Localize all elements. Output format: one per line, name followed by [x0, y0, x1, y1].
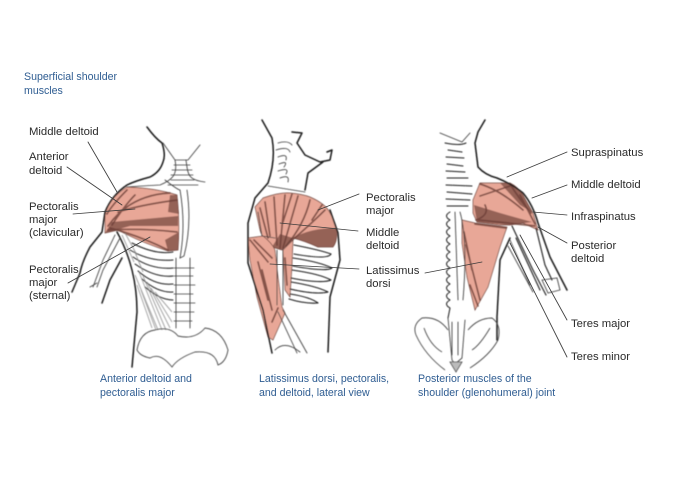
sacrum tip: [450, 362, 462, 372]
labels: posterior view: [571, 147, 644, 363]
labels: lateral view: [366, 192, 420, 290]
muscle: pectoralis and deltoid: [255, 193, 337, 250]
caption: anterior view: pectoralis major: [100, 387, 175, 399]
labels: lateral view: Pectoralis: [366, 192, 416, 204]
pelvis: [415, 318, 499, 370]
title: Superficial shoulder: [24, 71, 117, 83]
leader lines: anterior view: [67, 142, 150, 283]
caption: posterior view: shoulder (glenohumeral) joint: [418, 387, 555, 399]
labels: lateral view: major: [366, 205, 394, 217]
labels: anterior view: Anterior: [29, 151, 69, 163]
labels: anterior view: (sternal): [29, 290, 71, 302]
leader lines: lateral view: [270, 194, 359, 269]
labels: posterior view: deltoid: [571, 253, 604, 265]
body outline: [248, 120, 340, 353]
rib cage: [130, 243, 173, 300]
oblique shading: [122, 233, 172, 330]
muscle: latissimus dorsi: [462, 220, 507, 310]
caption: lateral view: and deltoid, lateral view: [259, 387, 370, 399]
labels: anterior view: Pectoralis: [29, 264, 79, 276]
labels: lateral view: Latissimus: [366, 265, 419, 277]
labels: anterior view: Middle deltoid: [29, 126, 99, 138]
labels: posterior view: Supraspinatus: [571, 147, 644, 159]
figure: lateral view: [248, 120, 340, 353]
labels: posterior view: Teres major: [571, 318, 630, 330]
spine and sternum: [127, 160, 205, 328]
torso and arm outline: [72, 127, 200, 367]
caption: anterior view: Anterior deltoid and: [100, 373, 192, 385]
pelvis: [137, 328, 228, 367]
labels: posterior view: Teres minor: [571, 351, 630, 363]
figure: posterior view: [415, 120, 567, 372]
muscle: anterior deltoid and pectoralis major: [105, 187, 179, 251]
labels: posterior view: Posterior: [571, 240, 616, 252]
caption: lateral view: Latissimus dorsi, pectoralis,: [259, 373, 389, 385]
labels: posterior view: Middle deltoid: [571, 179, 641, 191]
labels: lateral view: Middle: [366, 227, 399, 239]
labels: lateral view: deltoid: [366, 240, 399, 252]
labels: lateral view: dorsi: [366, 278, 390, 290]
caption: posterior view: Posterior muscles of the: [418, 373, 532, 385]
title: muscles: [24, 85, 63, 97]
spine: [440, 133, 472, 364]
lower arm: [275, 250, 300, 352]
rib cage: [289, 245, 332, 303]
labels: anterior view: [29, 126, 99, 302]
cervical spine: [268, 142, 305, 192]
labels: anterior view: Pectoralis: [29, 201, 79, 213]
body and arm outline: [475, 120, 567, 340]
labels: anterior view: major: [29, 277, 57, 289]
labels: anterior view: major: [29, 214, 57, 226]
figure: anterior view: [72, 127, 228, 367]
muscle: latissimus dorsi: [248, 236, 293, 340]
labels: posterior view: Infraspinatus: [571, 211, 636, 223]
muscle: deltoid and rotator cuff: [473, 183, 538, 230]
labels: anterior view: deltoid: [29, 165, 62, 177]
labels: anterior view: (clavicular): [29, 227, 84, 239]
leader lines: posterior view: [425, 152, 567, 357]
